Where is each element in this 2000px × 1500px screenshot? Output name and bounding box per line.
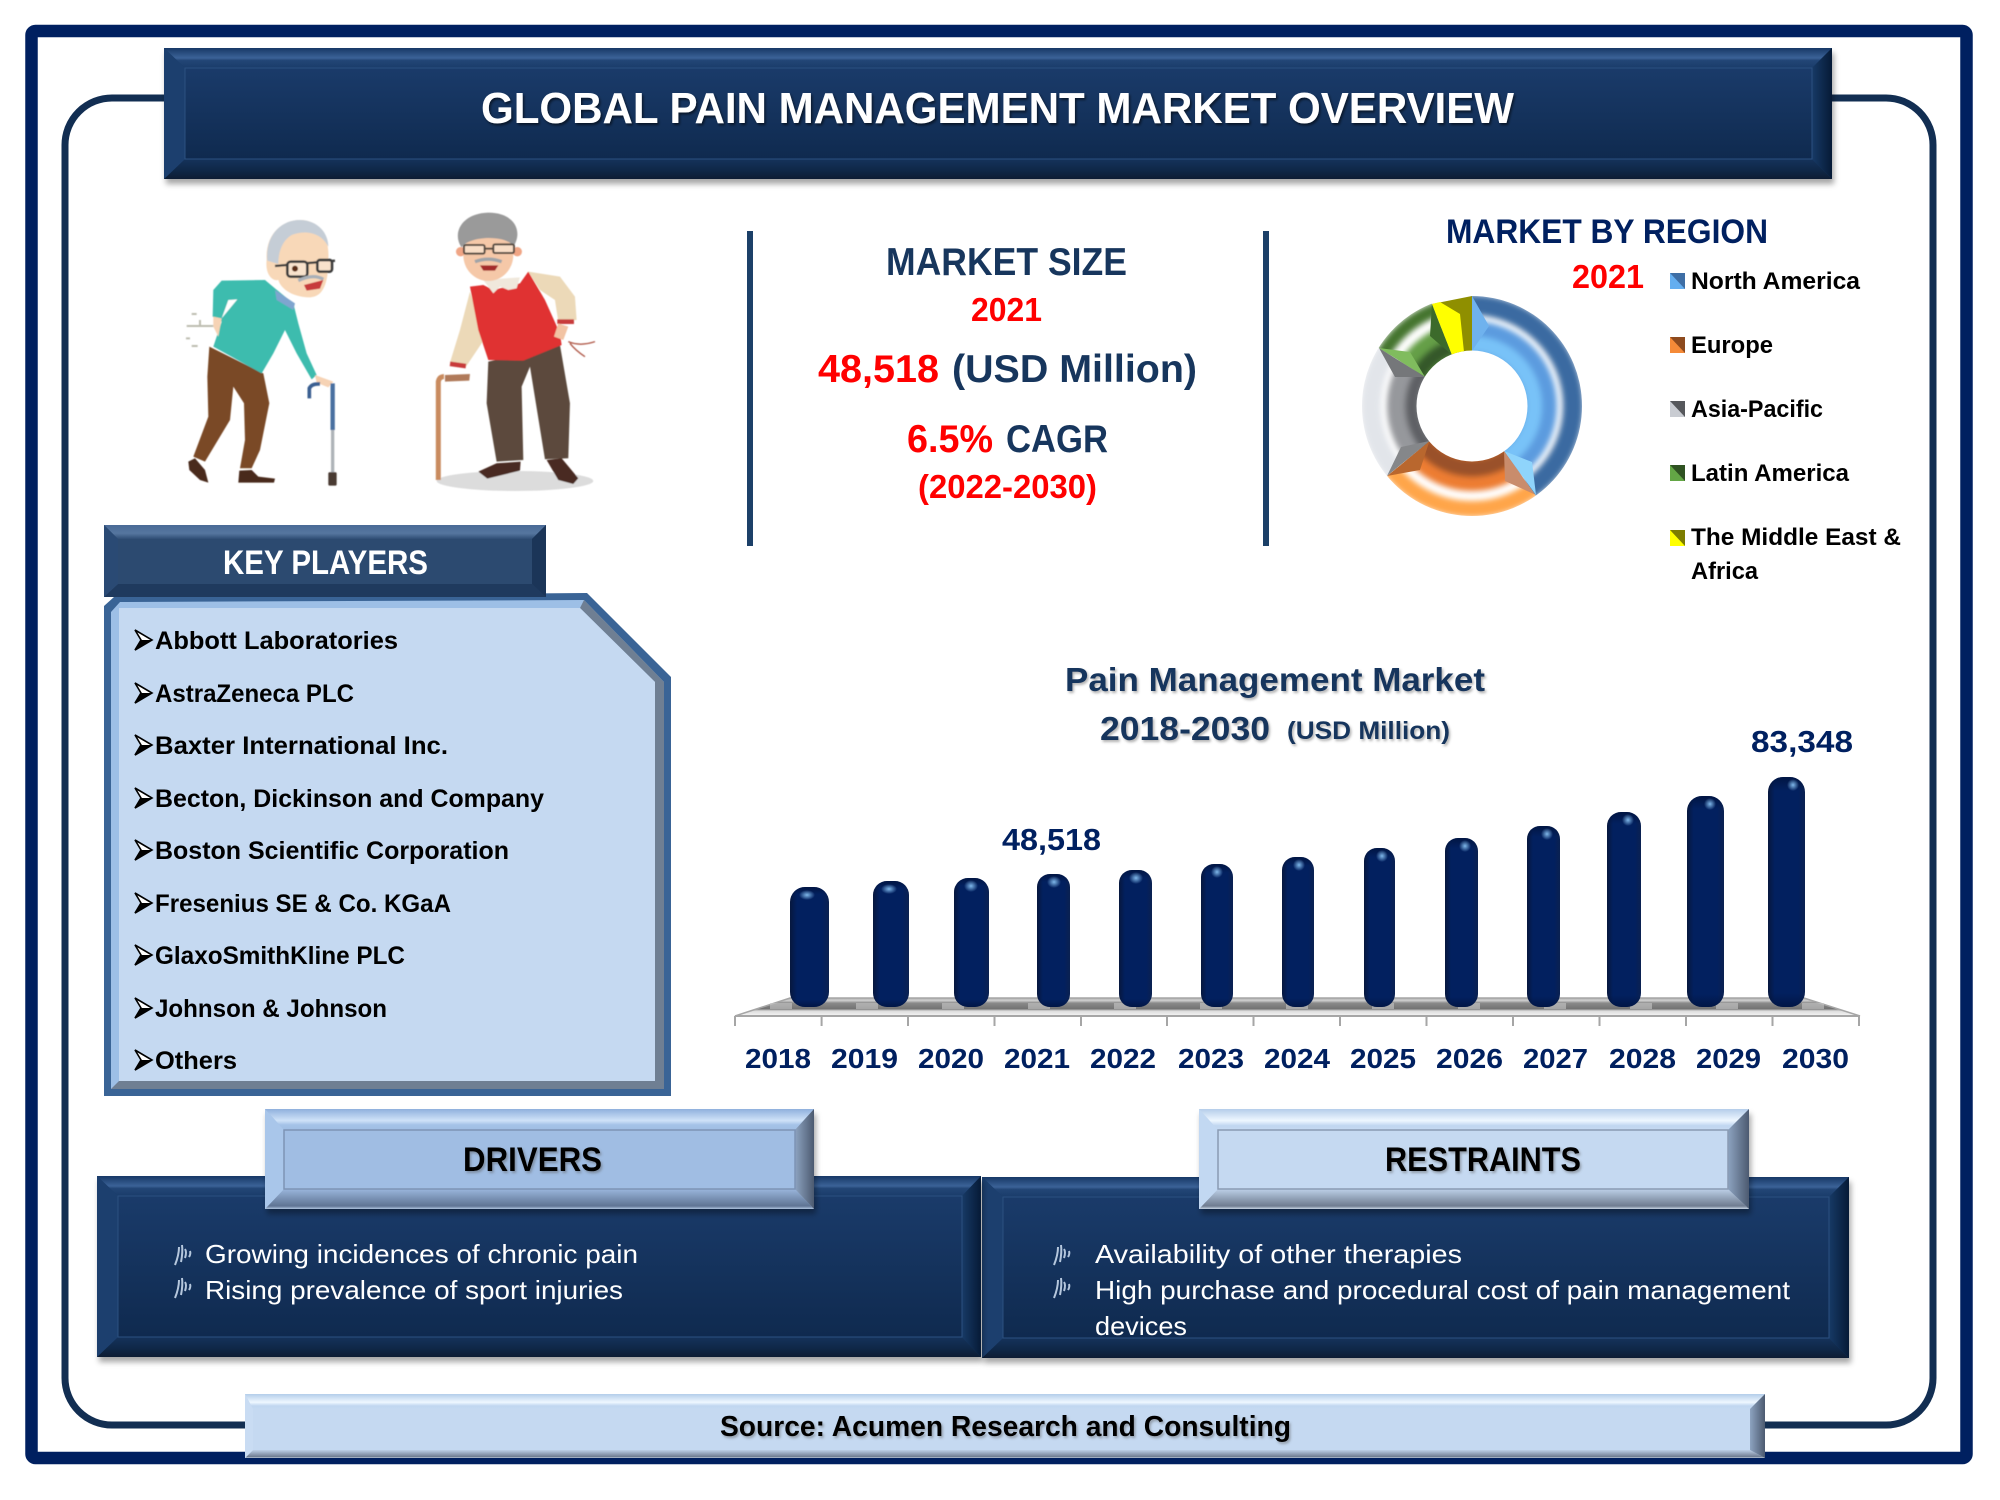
donut chart: market by region: [1369, 296, 1575, 509]
year labels: 2025: [1350, 1043, 1416, 1074]
year labels: 2018: [745, 1043, 811, 1074]
legend: market by region: [1670, 268, 1901, 585]
chart axis: [735, 1016, 1860, 1026]
bar 2024: [1282, 857, 1314, 1007]
year labels: 2027: [1523, 1043, 1588, 1074]
market by region year: 2021: [1572, 258, 1644, 295]
driver: sport injuries: Rising prevalence of sport injuries: [205, 1275, 623, 1305]
panel: restraints body: [982, 1177, 1849, 1358]
chart floor mottling: [770, 1003, 1830, 1009]
chart title line one: Pain Management Market: [1065, 661, 1485, 698]
restraints bullet icons: [1054, 1245, 1069, 1298]
market size year: 2021: [971, 291, 1042, 328]
divider: market size left: [747, 231, 753, 546]
driver: chronic pain: Growing incidences of chronic pain: [205, 1239, 638, 1269]
bar 2019: [873, 881, 909, 1007]
bar 2023: [1201, 864, 1233, 1007]
illustration: elderly man with hip pain and wooden cane (red vest): [437, 213, 595, 491]
market size heading: MARKET SIZE: [886, 241, 1127, 284]
year labels: [745, 1043, 1849, 1074]
year labels: 2024: [1264, 1043, 1330, 1074]
market size value: 48,518: [818, 348, 939, 391]
player: Others: Others: [155, 1047, 237, 1075]
key players banner: [104, 525, 546, 597]
drivers header: [265, 1109, 814, 1209]
market by region heading: MARKET BY REGION: [1446, 213, 1768, 251]
restraint: high cost: High purchase and procedural cost of pain management: [1095, 1275, 1791, 1305]
segment: Latin America: [1378, 304, 1452, 377]
player: Johnson and Johnson: Johnson & Johnson: [155, 995, 387, 1023]
chart floor: [735, 998, 1860, 1016]
key players entries: [135, 627, 544, 1075]
source text: Source: Acumen Research and Consulting: [720, 1411, 1291, 1443]
legend item: North America: North America: [1691, 268, 1861, 295]
bar 2028: [1607, 812, 1641, 1007]
bar 2025: [1364, 848, 1395, 1007]
legend item: The Middle East and Africa: [1670, 524, 1901, 585]
restraints heading: RESTRAINTS: [1385, 1141, 1581, 1179]
bar 2027: [1527, 826, 1560, 1007]
segment: North America: [1472, 296, 1582, 496]
player: Becton, Dickinson and Company: Becton, Dickinson and Company: [155, 785, 544, 813]
market size unit: (USD Million): [952, 348, 1197, 391]
year labels: 2028: [1609, 1043, 1676, 1074]
value label 2021: 48,518: [1002, 822, 1101, 857]
illustration: elderly man with back pain and walking cane (teal sweater): [186, 220, 337, 486]
year labels: 2020: [918, 1043, 984, 1074]
legend item: Asia-Pacific: Asia-Pacific: [1691, 396, 1823, 423]
player: Boston Scientific Corporation: Boston Scientific Corporation: [155, 837, 509, 865]
legend item: The Middle East and Africa: Africa: [1691, 558, 1759, 585]
market size block: [818, 241, 1197, 505]
restraint: high cost: [1095, 1275, 1791, 1341]
year labels: 2023: [1178, 1043, 1244, 1074]
bar 2022: [1119, 870, 1152, 1007]
player: Abbott Laboratories: Abbott Laboratories: [155, 627, 398, 655]
year labels: 2021: [1004, 1043, 1070, 1074]
bar chart: market size 2018-2030: [735, 724, 1860, 1074]
restraint: other therapies: Availability of other therapies: [1095, 1239, 1462, 1269]
legend item: Europe: Europe: [1691, 332, 1773, 359]
source banner: [245, 1394, 1765, 1458]
year labels: 2030: [1782, 1043, 1849, 1074]
chart title: [1065, 661, 1485, 747]
bar 2030: [1768, 777, 1805, 1007]
restraint: high cost: devices: [1095, 1311, 1187, 1341]
legend item: The Middle East and Africa: The Middle East &: [1691, 524, 1901, 551]
bar 2020: [954, 878, 989, 1007]
player: AstraZeneca PLC: AstraZeneca PLC: [155, 680, 354, 708]
legend item: Latin America: Latin America: [1691, 460, 1850, 487]
year labels: 2026: [1436, 1043, 1503, 1074]
panel: drivers body: [97, 1176, 981, 1357]
key players heading: KEY PLAYERS: [223, 544, 428, 582]
player: Fresenius SE and Co. KGaA: Fresenius SE & Co. KGaA: [155, 890, 451, 918]
bar 2021: [1037, 874, 1070, 1007]
bar 2018: [790, 887, 829, 1007]
chart title unit: (USD Million): [1287, 717, 1450, 745]
value label 2030: 83,348: [1751, 724, 1853, 759]
bar 2026: [1445, 838, 1478, 1007]
player: GlaxoSmithKline PLC: GlaxoSmithKline PLC: [155, 942, 405, 970]
chart title years: 2018-2030: [1100, 710, 1270, 747]
CAGR value: 6.5%: [907, 418, 993, 461]
title banner: [164, 48, 1832, 179]
year labels: 2019: [831, 1043, 898, 1074]
drivers heading: DRIVERS: [463, 1141, 602, 1179]
restraints header: [1199, 1109, 1749, 1209]
key players list panel: [104, 593, 671, 1096]
divider: market by region left: [1263, 231, 1269, 546]
CAGR period: (2022-2030): [918, 468, 1097, 505]
drivers bullet icons: [175, 1245, 190, 1298]
segment: Europe: [1387, 441, 1536, 516]
title text: GLOBAL PAIN MANAGEMENT MARKET OVERVIEW: [481, 84, 1514, 133]
bar 2029: [1687, 796, 1724, 1007]
year labels: 2029: [1696, 1043, 1761, 1074]
year labels: 2022: [1090, 1043, 1156, 1074]
CAGR label: CAGR: [1006, 418, 1108, 461]
segment: Middle East and Africa: [1432, 296, 1472, 355]
player: Baxter International Inc.: Baxter International Inc.: [155, 732, 448, 760]
segment: Asia-Pacific: [1362, 348, 1430, 476]
